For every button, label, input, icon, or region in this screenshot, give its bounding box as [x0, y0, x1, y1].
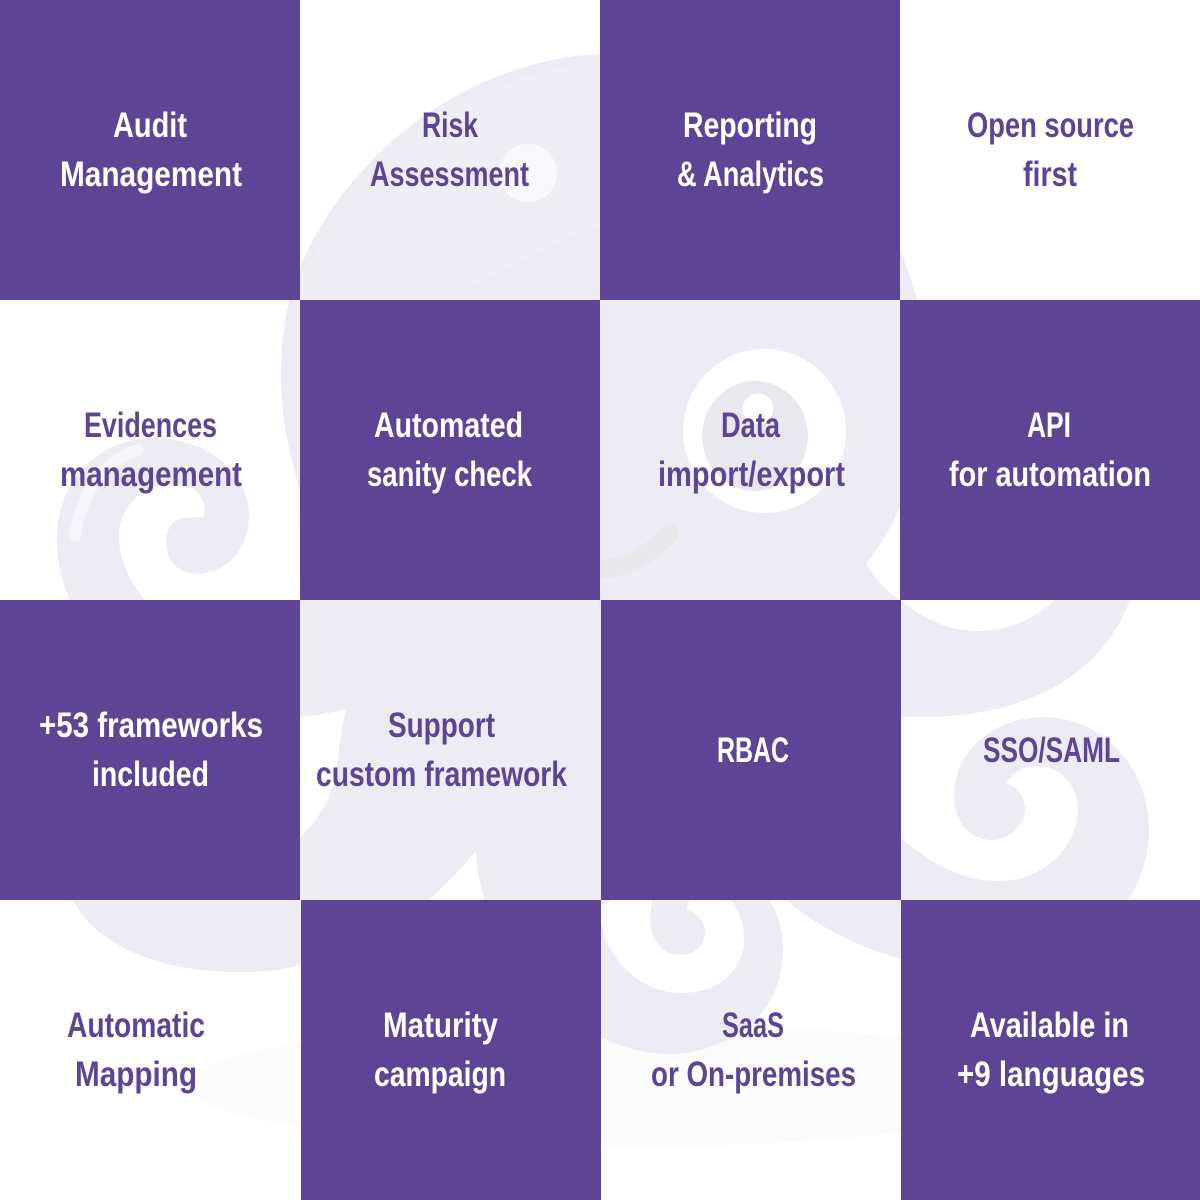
tile: Data import/export: import/export: [658, 455, 845, 494]
tile: Support custom framework: custom framework: [316, 755, 567, 794]
tile: Evidences management: Evidences: [84, 406, 217, 445]
tile: Evidences management: management: [60, 455, 242, 494]
tile: API for automation: for automation: [949, 455, 1151, 494]
tile: Automatic Mapping: Automatic: [67, 1006, 205, 1045]
octopus shadow: [188, 1023, 1052, 1147]
tile: Risk Assessment: Risk: [422, 106, 478, 145]
octopus head highlight: [300, 63, 640, 300]
octopus body: [60, 54, 930, 972]
tile: Audit Management: Management: [60, 155, 242, 194]
tile: Evidences management: [60, 406, 242, 494]
tile: SaaS or On-premises: SaaS: [722, 1006, 784, 1045]
tile: Support custom framework: [316, 706, 567, 794]
bottom tentacle tip: [650, 890, 705, 955]
octopus eye: [683, 349, 846, 513]
tile: API for automation: API: [1027, 406, 1071, 445]
tile: Automated sanity check: sanity check: [367, 455, 532, 494]
tile: Available in +9 languages: +9 languages: [957, 1055, 1145, 1094]
tile: Data import/export: [658, 406, 845, 494]
tile: Automatic Mapping: [67, 1006, 205, 1094]
tile: Maturity campaign: [301, 900, 601, 1200]
tile: RBAC: [601, 600, 901, 900]
tile: Open source first: [967, 106, 1134, 194]
tile: Maturity campaign: Maturity: [383, 1006, 498, 1045]
lower right tentacle: [787, 890, 910, 960]
tile: Maturity campaign: campaign: [374, 1055, 506, 1094]
tile: Audit Management: [0, 0, 300, 300]
tile: Automatic Mapping: Mapping: [75, 1055, 197, 1094]
tile: RBAC: RBAC: [717, 731, 789, 770]
left curled tentacle: [57, 438, 249, 600]
octopus smile: [590, 533, 670, 570]
tile: Risk Assessment: Assessment: [370, 155, 529, 194]
tile: Open source first: Open source: [967, 106, 1134, 145]
tile: Data import/export: Data: [721, 406, 780, 445]
right tentacle band: [880, 590, 1130, 717]
tile: +53 frameworks included: included: [92, 755, 209, 794]
tile: +53 frameworks included: [0, 600, 300, 900]
tile: SaaS or On-premises: [651, 1006, 856, 1094]
tile: Audit Management: Audit: [113, 106, 187, 145]
tile: Automated sanity check: [300, 300, 600, 600]
tile: Open source first: first: [1023, 155, 1077, 194]
tile: Automated sanity check: Automated: [374, 406, 523, 445]
tile: Available in +9 languages: [901, 900, 1200, 1200]
tile: SSO/SAML: SSO/SAML: [983, 731, 1120, 770]
tile: Reporting & Analytics: & Analytics: [677, 155, 824, 194]
tile: Reporting & Analytics: Reporting: [683, 106, 817, 145]
tile: +53 frameworks included: +53 frameworks: [39, 706, 263, 745]
tile: SaaS or On-premises: or On-premises: [651, 1055, 856, 1094]
tile: Support custom framework: Support: [388, 706, 495, 745]
bottom curled tentacle: [590, 890, 783, 1054]
tile: Reporting & Analytics: [600, 0, 900, 300]
tile: Available in +9 languages: Available in: [970, 1006, 1129, 1045]
tile: API for automation: [900, 300, 1200, 600]
tile: Risk Assessment: [370, 106, 529, 194]
right curled tentacle: [890, 717, 1149, 900]
head shine: [499, 144, 557, 202]
